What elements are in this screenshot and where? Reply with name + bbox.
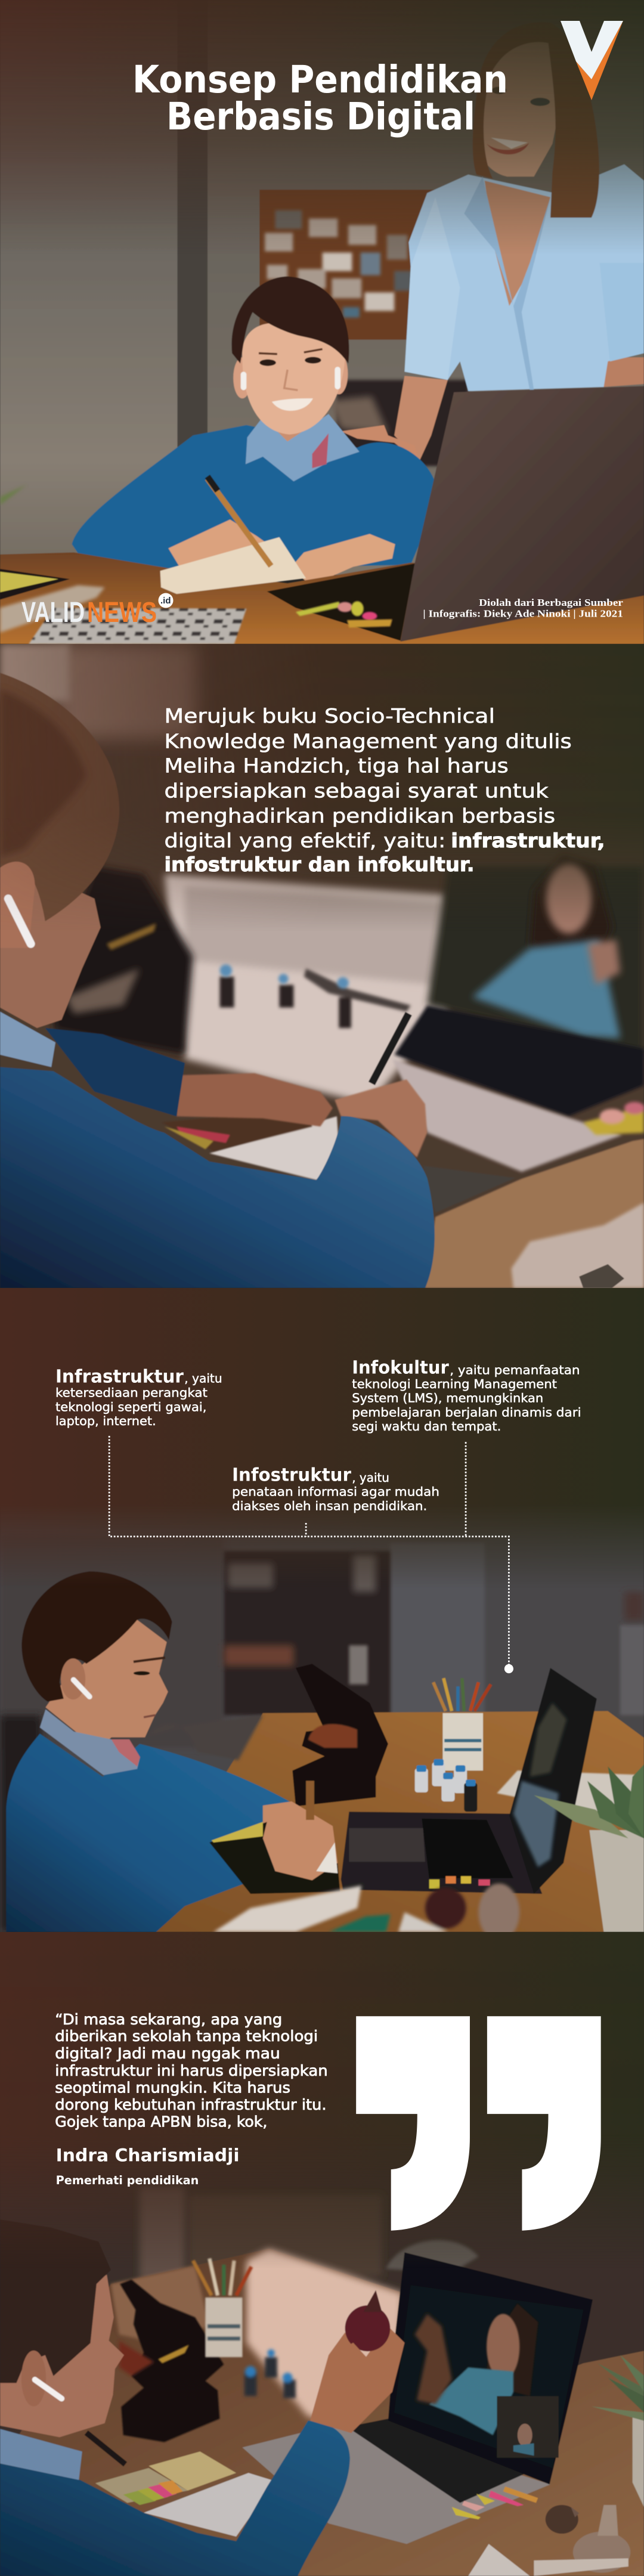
- microscope: [120, 2280, 224, 2442]
- boy with onion: [0, 2219, 404, 2576]
- panel: intro paragraph: [0, 644, 644, 1288]
- bottles: [244, 2349, 296, 2398]
- text: infostruktur: penataan informasi agar mudah: [232, 1485, 439, 1499]
- boy from behind: [0, 673, 435, 1288]
- logo: ValidNews.id: NEWS: [87, 597, 157, 628]
- intro paragraph text: Meliha Handzich, tiga hal harus: [165, 754, 509, 778]
- text: infrastruktur: ketersediaan perangkat: [55, 1386, 208, 1400]
- quote text: infrastruktur ini harus dipersiapkan: [55, 2062, 328, 2079]
- text: infokultur: teknologi Learning Management: [352, 1377, 557, 1391]
- quote text: dorong kebutuhan infrastruktur itu.: [55, 2096, 327, 2113]
- table and desk items: [0, 386, 644, 644]
- foreground items: [213, 1884, 519, 1941]
- plastic box: [512, 1203, 644, 1288]
- logo: ValidNews.id: [21, 593, 173, 628]
- text: infostruktur: Infostruktur: [232, 1465, 351, 1486]
- quote attribution: Pemerhati pendidikan: [56, 2174, 199, 2187]
- photo: teacher and smiling boy at desk: [0, 0, 644, 644]
- logo: ValidNews.id: VALID: [21, 597, 85, 628]
- text: infokultur: Infokultur: [352, 1357, 449, 1378]
- title: Berbasis Digital: [166, 95, 475, 138]
- plant: [592, 2355, 644, 2507]
- intro paragraph text: digital yang efektif, yaitu:: [165, 829, 445, 852]
- blurred laptop screen with teacher: [427, 856, 644, 1055]
- logo: ValidNews.id: .id: [160, 596, 171, 606]
- quote text: digital? Jadi mau nggak mau: [55, 2045, 280, 2062]
- text: infokultur: pembelajaran berjalan dinamis dari: [352, 1405, 581, 1420]
- quote text: Gojek tanpa APBN bisa, kok,: [55, 2113, 267, 2130]
- connector: dotted lines: [109, 1436, 509, 1668]
- quote text: “Di masa sekarang, apa yang: [55, 2011, 282, 2028]
- laptop: [242, 2252, 593, 2544]
- dark microscope blur: [54, 866, 193, 1055]
- bottles: [415, 1759, 477, 1812]
- quote text: seoptimal mungkin. Kita harus: [55, 2079, 290, 2096]
- text: infokultur: [352, 1357, 581, 1433]
- quote text: [55, 2011, 328, 2130]
- microscope: [292, 1664, 388, 1806]
- text: infokultur: , yaitu pemanfaatan: [450, 1363, 580, 1377]
- icon: V logo: [561, 21, 623, 100]
- text: infrastruktur: , yaitu: [184, 1371, 222, 1385]
- intro paragraph text: [165, 704, 605, 876]
- table: [128, 1711, 644, 1932]
- intro paragraph text: Merujuk buku Socio-Technical: [165, 704, 495, 727]
- intro paragraph text: dipersiapkan sebagai syarat untuk: [165, 779, 549, 803]
- text: infostruktur: [232, 1465, 439, 1513]
- notebook with tabs: [86, 2433, 275, 2537]
- video call teacher: [415, 2303, 559, 2458]
- panel: three pillars: [0, 1288, 644, 1932]
- connector end dot: [504, 1664, 513, 1673]
- intro paragraph text: infostruktur dan infokultur.: [165, 853, 475, 876]
- photo: boy at desk with microscope and laptop: [0, 1288, 644, 1941]
- quote attribution: [56, 2145, 240, 2187]
- text: infrastruktur: Infrastruktur: [55, 1366, 184, 1387]
- woman: [341, 22, 644, 462]
- credit text: Diolah dari Berbagai Sumber: [479, 597, 623, 608]
- quote attribution: Indra Charismiadji: [56, 2145, 240, 2165]
- intro paragraph text: menghadirkan pendidikan berbasis: [165, 804, 555, 828]
- garlic and onions: [468, 2505, 630, 2576]
- text: infokultur: segi waktu dan tempat.: [352, 1419, 501, 1433]
- quote text: diberikan sekolah tanpa teknologi: [55, 2027, 318, 2045]
- dark gradient overlay: [0, 644, 644, 931]
- dark gradient overlay: [0, 1288, 644, 1588]
- intro paragraph text: infrastruktur,: [451, 829, 605, 852]
- laptop: [341, 1668, 597, 1894]
- photo: boy showing onion to teacher on laptop: [0, 1932, 644, 2576]
- text: infrastruktur: teknologi seperti gawai,: [55, 1400, 206, 1414]
- boy: [72, 277, 435, 583]
- intro paragraph text: Knowledge Management yang ditulis: [165, 729, 572, 753]
- pencil cup: [193, 2259, 252, 2357]
- table: [0, 2249, 644, 2576]
- corkboard with photos: [259, 190, 475, 340]
- title: Konsep Pendidikan: [132, 58, 508, 101]
- title: [132, 58, 508, 138]
- text: infrastruktur: [55, 1366, 222, 1428]
- photo: boy writing seen from behind: [0, 644, 644, 1288]
- text: infostruktur: , yaitu: [352, 1470, 389, 1485]
- boy profile: [6, 1571, 340, 1932]
- plant and pot: [534, 1764, 644, 1932]
- dark gradient overlay: [0, 0, 644, 255]
- text: infokultur: System (LMS), memungkinkan: [352, 1391, 543, 1405]
- text: infostruktur: diakses oleh insan pendidikan.: [232, 1499, 427, 1513]
- credit text: [423, 597, 623, 620]
- credit text: | Infografis: Dieky Ade Ninoki | Juli 2021: [423, 608, 623, 620]
- text: infrastruktur: laptop, internet.: [55, 1414, 156, 1428]
- panel: hero photo with title: [0, 0, 644, 644]
- notebook and writing hands: [162, 1014, 427, 1180]
- pencil cup: [434, 1678, 491, 1770]
- panel: expert quote: [0, 1932, 644, 2576]
- icon: large quotation marks: [356, 2016, 601, 2231]
- dark gradient overlay: [0, 1932, 644, 2269]
- sticky tabs on laptop: [583, 1102, 644, 1135]
